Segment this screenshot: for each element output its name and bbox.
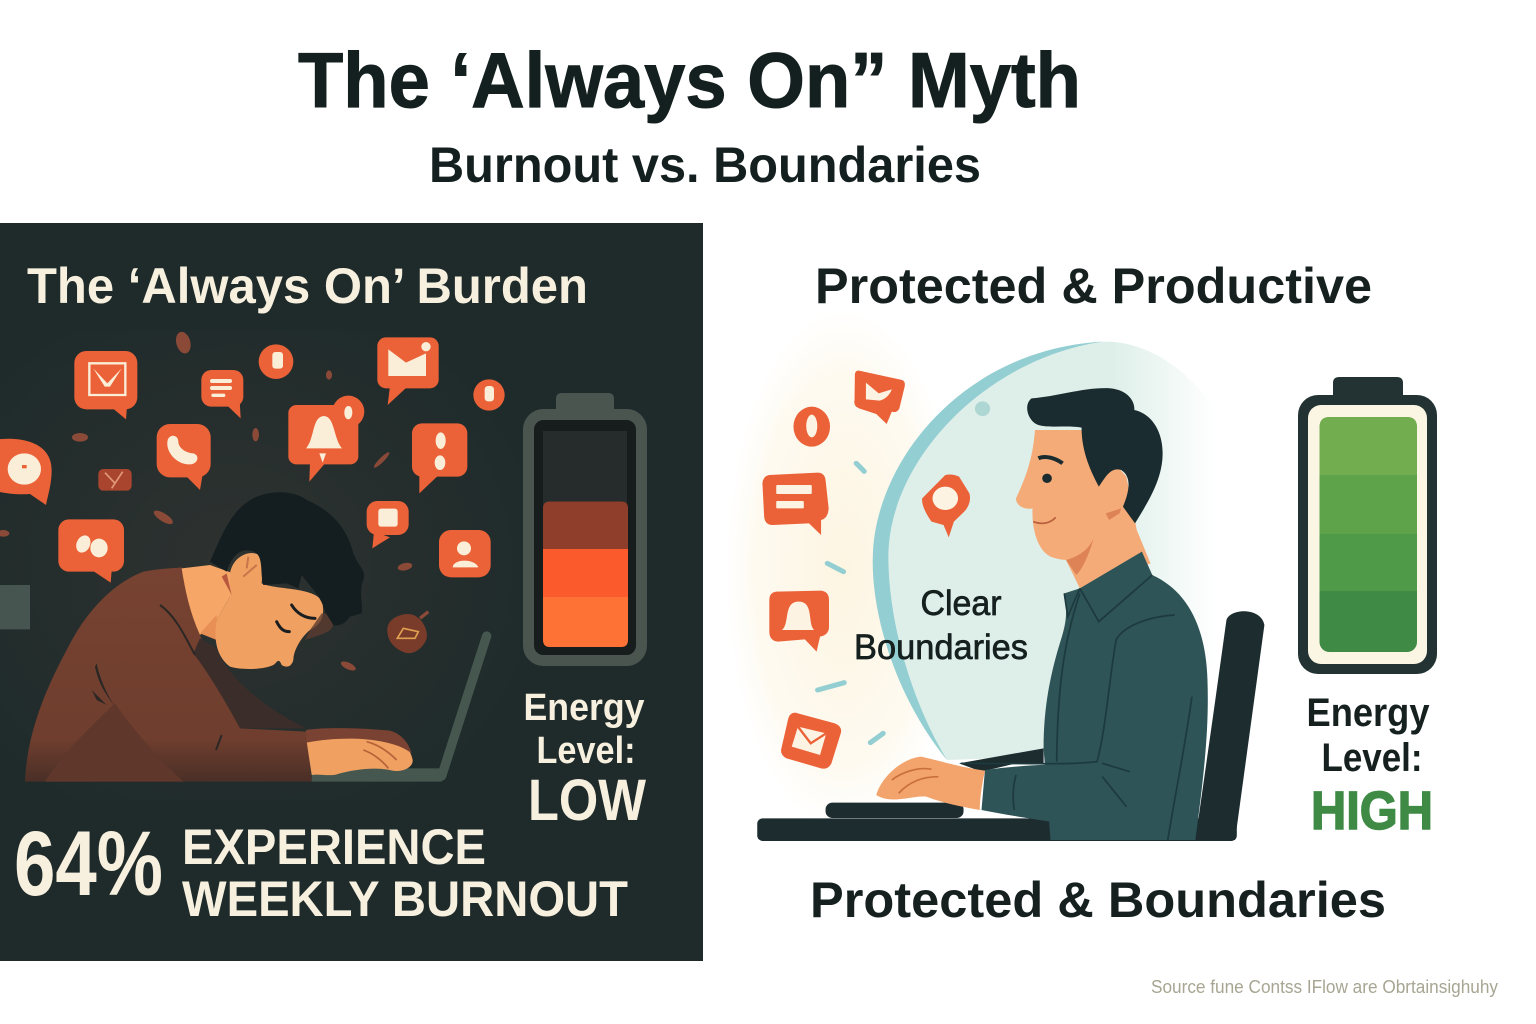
low energy label: Level: xyxy=(536,730,636,772)
man neck and head xyxy=(1016,430,1151,588)
clear boundaries label: Boundaries xyxy=(854,628,1028,667)
low energy battery xyxy=(528,393,642,660)
burnout statistic: EXPERIENCE xyxy=(182,819,486,875)
illustration: burned-out worker with notifications xyxy=(0,330,505,782)
panel heading: protected: Protected & Productive xyxy=(815,258,1372,314)
high energy battery xyxy=(1298,377,1437,674)
high energy label: Energy xyxy=(1306,691,1430,735)
worker neck and face xyxy=(182,565,233,635)
low energy label: LOW xyxy=(528,768,646,833)
high energy label: HIGH xyxy=(1311,781,1433,841)
notification specks xyxy=(0,330,413,672)
panel heading: burden: The ‘Always On’ Burden xyxy=(27,258,588,314)
panel: protected and productive xyxy=(726,258,1437,928)
subtitle: Burnout vs. Boundaries xyxy=(429,137,981,193)
low energy label: Energy xyxy=(524,687,644,729)
notification glyphs xyxy=(776,383,958,755)
panel: always on burden xyxy=(0,223,703,961)
dim mail icon xyxy=(98,469,132,491)
burnout statistic xyxy=(14,813,628,927)
dim broken notification xyxy=(387,614,427,653)
keyboard xyxy=(826,803,964,818)
high energy label: Level: xyxy=(1322,736,1422,780)
clear boundaries label xyxy=(854,584,1028,667)
deflection dashes xyxy=(818,463,883,743)
deflected notifications xyxy=(762,371,970,769)
boundary shield xyxy=(873,342,1220,760)
low energy label xyxy=(524,687,646,833)
laptop xyxy=(312,636,487,782)
warm glow xyxy=(726,310,961,830)
man hand xyxy=(876,757,985,810)
burnout statistic: WEEKLY BURNOUT xyxy=(182,871,628,927)
illustration: calm worker behind boundary shield xyxy=(726,310,1264,841)
title: The ‘Always On” Myth xyxy=(298,36,1081,124)
desk xyxy=(757,818,1237,841)
notification bubbles xyxy=(0,337,505,583)
burnout statistic: 64% xyxy=(14,813,163,915)
chair xyxy=(1195,611,1264,840)
worker body xyxy=(25,567,312,782)
man shirt xyxy=(1044,552,1208,840)
wall plate xyxy=(0,585,30,629)
man hair xyxy=(1027,388,1163,523)
high energy label xyxy=(1306,691,1433,841)
bubble glyphs xyxy=(8,342,494,567)
source note: Source fune Contss IFlow are Obrtainsighuhy xyxy=(1151,977,1498,997)
panel footer heading: Protected & Boundaries xyxy=(810,872,1386,928)
clear boundaries label: Clear xyxy=(920,584,1002,623)
worker hand xyxy=(307,731,413,775)
worker hair xyxy=(210,492,364,625)
